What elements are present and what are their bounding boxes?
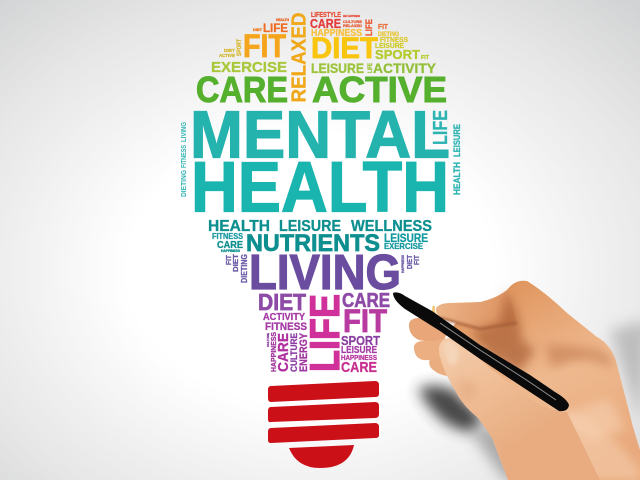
band: teal words: EXERCISE: [384, 241, 423, 251]
band: teal words: LEISURE: [384, 231, 428, 245]
band: yellow and orange words: ACTIVE: [219, 53, 235, 58]
band: purple and magenta words: ENERGY: [298, 332, 310, 372]
band: teal words: FITNESS: [212, 232, 244, 241]
band: red and orange words: FIT: [378, 24, 389, 31]
band: yellow and orange words: FITNESS: [380, 37, 408, 44]
side words around LIVING: FIT: [414, 254, 421, 265]
band: teal words: WELLNESS: [351, 218, 432, 235]
band: yellow and orange words: DIET: [311, 32, 378, 65]
band: lime words: ACTIVITY: [373, 60, 437, 76]
band: red and orange words: LIFESTYLE: [311, 10, 341, 19]
band: purple and magenta words: HAPPINESS: [341, 353, 377, 362]
side words around the title: LIVING: [181, 122, 188, 142]
band: red and orange words: CARE: [310, 16, 341, 31]
side words around the title: [181, 110, 462, 197]
band: purple and magenta words: CARE: [342, 290, 390, 312]
icon: pen: [393, 292, 569, 411]
band: lime words: LEISURE: [311, 60, 364, 76]
band: purple and magenta words: CULTURE: [289, 333, 299, 372]
band: yellow and orange words: RELAXED: [288, 12, 310, 102]
middle finger: [409, 318, 450, 341]
band: red and orange words: LIFE: [263, 21, 288, 35]
band: purple and magenta words: ACTIVITY: [263, 312, 305, 323]
little finger: [429, 350, 452, 376]
band: red and orange words: DIET: [253, 28, 262, 32]
band: lime words: FIT: [421, 55, 429, 61]
band: teal words: LEISURE: [279, 218, 341, 235]
band: red and orange words: [253, 10, 389, 36]
word: LIVING: LIVING: [249, 246, 401, 300]
band: teal words: NUTRIENTS: [246, 230, 380, 257]
index finger: [436, 290, 516, 328]
side words around LIVING: FIT: [226, 254, 233, 265]
bulb base: three red bars and cap: [268, 381, 379, 468]
band: purple and magenta words: FITNESS: [265, 321, 307, 333]
band: purple and magenta words: CARE: [276, 333, 292, 372]
side words around the title: LEISURE: [452, 124, 462, 157]
side words around the title: FITNESS: [181, 145, 188, 168]
band: teal words: CARE: [217, 240, 243, 251]
band: lime words: EXERCISE: [211, 59, 287, 76]
band: teal words: HEALTH: [208, 218, 270, 235]
band: yellow and orange words: DIET: [224, 48, 235, 53]
band: purple and magenta words: FIT: [343, 303, 387, 339]
band: purple and magenta words: DIET: [258, 289, 306, 315]
band: yellow and orange words: HAPPINESS: [311, 28, 362, 39]
side words around LIVING: DIET: [407, 254, 414, 269]
thumb: [439, 338, 600, 480]
band: red and orange words: HEALTH: [276, 18, 290, 22]
band: yellow and orange words: FIT: [243, 28, 286, 64]
side words around LIVING: DIET: [233, 253, 240, 272]
side words around LIVING: DIETING: [240, 254, 249, 283]
band: red and orange words: CULTURE: [343, 19, 362, 24]
band: teal words: HAPPINESS: [221, 249, 240, 253]
band: yellow and orange words: SPORT: [237, 39, 243, 56]
band: purple and magenta words: SPORT: [341, 333, 380, 348]
band: purple and magenta words: CULTURE: [266, 333, 270, 347]
band: purple and magenta words: HAPPINESS: [271, 332, 278, 372]
band: red and orange words: LIFE: [364, 19, 375, 36]
band: yellow and orange words: DIETING: [378, 32, 399, 38]
word: HEALTH: HEALTH: [191, 148, 449, 228]
band: purple and magenta words: CARE: [341, 360, 377, 376]
band: red and orange words: DIET HAPPINESS: [343, 14, 360, 18]
band: purple and magenta words: [258, 289, 390, 376]
side words around the title: DIETING: [181, 169, 188, 197]
band: red and orange words: RELAXED: [343, 23, 362, 28]
hand shading: [470, 292, 535, 372]
band: lime words: [211, 48, 437, 76]
hand shadow: [418, 320, 640, 480]
side words around LIVING: [226, 253, 421, 283]
back of hand: [450, 281, 640, 480]
side words around LIVING: HAPPINESS: [401, 255, 405, 273]
band: teal words: [208, 218, 432, 257]
band: lime words: LIFE: [368, 63, 374, 73]
ring finger: [414, 338, 445, 360]
band: lime words: SPORT: [375, 48, 420, 62]
band: purple and magenta words: LEISURE: [341, 345, 377, 356]
word: CARE: CARE: [196, 69, 288, 110]
band: yellow and orange words: LEISURE: [375, 43, 404, 50]
word: MENTAL: MENTAL: [190, 98, 450, 172]
band: yellow and orange words: [219, 12, 408, 102]
side words around the title: HEALTH: [452, 162, 462, 195]
hand holding pen: [393, 281, 640, 480]
word: LIFE (vertical magenta): LIFE: [301, 294, 348, 372]
side words around the title: LIFE: [430, 110, 452, 145]
word: ACTIVE: ACTIVE: [312, 69, 447, 110]
